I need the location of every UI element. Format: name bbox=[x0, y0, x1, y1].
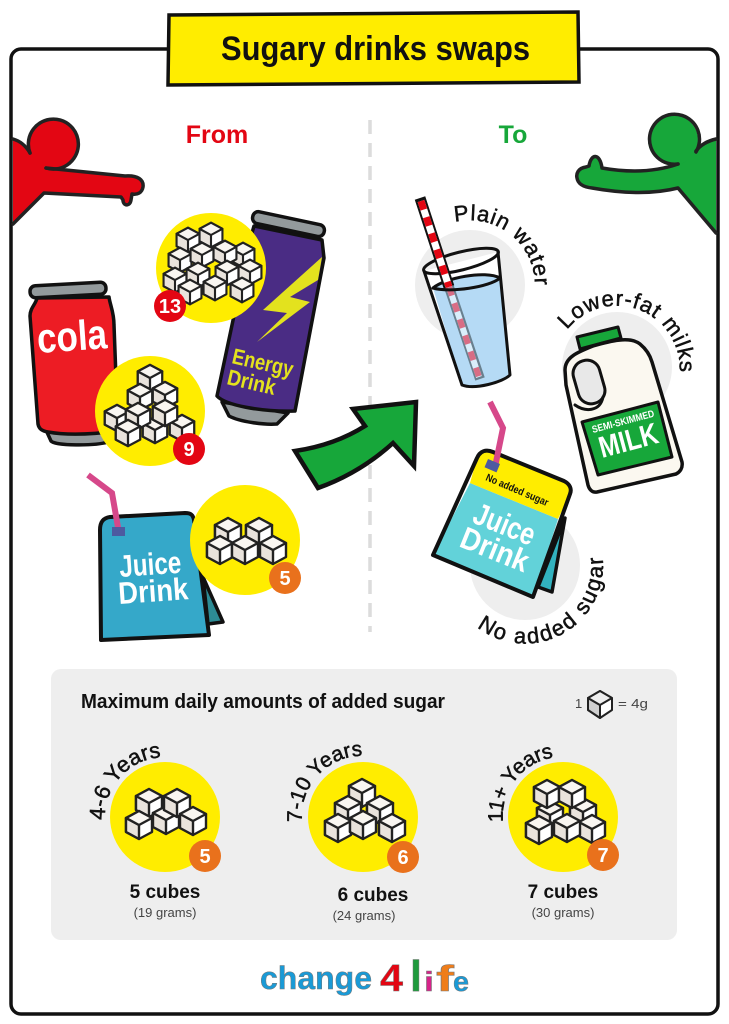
column: 7-10 years: 6 cubes bbox=[338, 885, 408, 906]
sugar circle: energy drink, 13 cubes bbox=[154, 213, 266, 323]
logo: change 4 life: l bbox=[410, 952, 422, 1001]
plain water glass bbox=[415, 198, 525, 387]
badge: 13: 13 bbox=[159, 296, 181, 318]
column: 4-6 years: 5 cubes bbox=[130, 882, 200, 903]
no added sugar juice carton: Drink bbox=[455, 520, 535, 579]
column: 7-10 years: 7-10 Years bbox=[287, 744, 362, 822]
energy drink can: Drink bbox=[225, 365, 279, 400]
cola can: cola bbox=[35, 310, 109, 362]
column: 11+ years: 7 cubes bbox=[528, 882, 598, 903]
badge: 5: 5 bbox=[279, 568, 291, 590]
cola can bbox=[30, 282, 118, 445]
panel: maximum daily amounts bbox=[51, 669, 677, 940]
sugar circle: cola, 9 cubes bbox=[95, 356, 205, 466]
thumbs up figure bbox=[577, 114, 716, 233]
column: 7-10 years bbox=[287, 744, 419, 923]
label: plain water: Plain water bbox=[454, 204, 547, 285]
label: lower-fat milks: Lower-fat milks bbox=[556, 293, 694, 372]
lower-fat milk jug: MILK bbox=[595, 417, 662, 465]
lower-fat milk jug: SEMI-SKIMMED bbox=[591, 409, 656, 436]
badge: 6: 6 bbox=[397, 847, 409, 869]
straw above water bbox=[420, 198, 449, 287]
logo: change 4 life: change bbox=[260, 960, 372, 996]
column: 11+ years: 11+ Years bbox=[488, 747, 552, 821]
panel heading: Maximum daily amounts of added sugar bbox=[81, 691, 445, 713]
swap arrow bbox=[295, 402, 416, 488]
juice drink carton: Juice bbox=[118, 545, 182, 584]
badge: 9: 9 bbox=[183, 439, 195, 461]
lightning bolt bbox=[257, 257, 322, 342]
title banner bbox=[168, 12, 579, 85]
badge: 7 bbox=[587, 839, 619, 871]
heading: To: To bbox=[499, 121, 527, 149]
thumbs down figure bbox=[13, 118, 143, 224]
logo: change 4 life: i bbox=[424, 966, 434, 997]
column: 7-10 years: (24 grams) bbox=[333, 908, 395, 923]
column: 4-6 years: 4-6 Years bbox=[90, 746, 160, 820]
no added sugar juice carton: Juice bbox=[468, 496, 541, 552]
column: 4-6 years bbox=[90, 746, 221, 920]
juice drink carton bbox=[88, 475, 223, 640]
logo: change 4 life: 4 bbox=[380, 958, 403, 1000]
straw in water bbox=[449, 287, 480, 379]
energy drink can: Energy bbox=[230, 344, 297, 382]
logo: change 4 life bbox=[260, 952, 469, 1001]
logo: change 4 life: e bbox=[453, 966, 469, 997]
badge: 5 bbox=[189, 840, 221, 872]
badge: 5: 5 bbox=[199, 846, 211, 868]
no added sugar juice carton bbox=[433, 402, 580, 620]
juice drink carton: Drink bbox=[117, 571, 190, 611]
logo: change 4 life: f bbox=[436, 958, 456, 999]
heading: From: From bbox=[186, 121, 248, 149]
label: no added sugar: No added sugar bbox=[478, 558, 606, 644]
lower-fat milk jug bbox=[562, 312, 682, 492]
title banner: Sugary drinks swaps bbox=[221, 30, 530, 68]
column: 11+ years: (30 grams) bbox=[532, 905, 594, 920]
centre divider bbox=[368, 120, 372, 632]
legend: 1 cube = 4g bbox=[575, 691, 648, 718]
column: 4-6 years: (19 grams) bbox=[134, 905, 196, 920]
column: 11+ years bbox=[488, 747, 619, 920]
sugar circle: juice drink, 5 cubes bbox=[190, 485, 301, 595]
badge: 7: 7 bbox=[597, 845, 609, 867]
legend: 1 cube = 4g: 1 bbox=[575, 696, 582, 711]
no added sugar juice carton: No added sugar bbox=[484, 472, 550, 509]
badge: 6 bbox=[387, 841, 419, 873]
legend: 1 cube = 4g: = 4g bbox=[618, 696, 648, 711]
energy drink can bbox=[217, 211, 325, 424]
